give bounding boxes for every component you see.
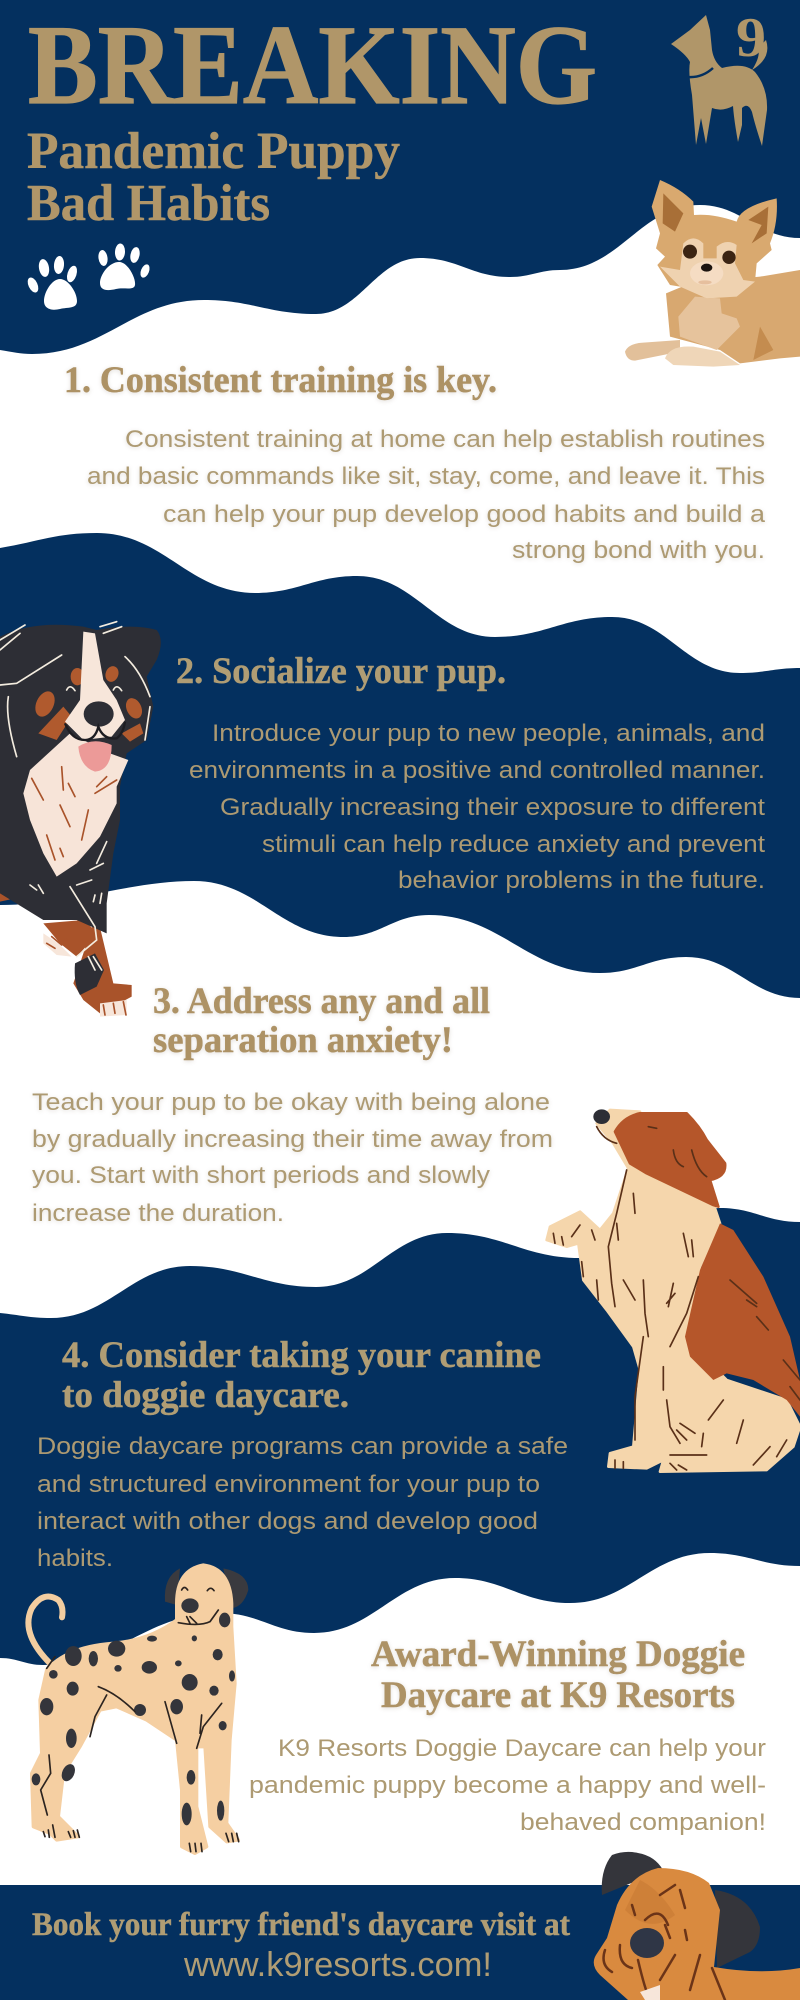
callout: booking text: www.k9resorts.com! — [183, 1946, 492, 1984]
text block 1: strong bond with you. — [512, 537, 765, 564]
heading 4: 4. Consider taking your canine — [62, 1335, 541, 1376]
illustration: chihuahua puppy — [625, 180, 800, 367]
heading 3: 3. Address any and all — [153, 981, 490, 1022]
subtitle: Pandemic Puppy — [27, 123, 400, 180]
heading: award-winning daycare: Award-Winning Doggie — [371, 1634, 745, 1675]
header wave panel — [0, 0, 800, 354]
icon: K9 logo: 9 — [736, 7, 766, 69]
icon: K9 logo — [671, 7, 767, 146]
text block 2: stimuli can help reduce anxiety and prevent — [262, 831, 765, 858]
heading 1: 1. Consistent training is key. — [64, 360, 497, 401]
text block 3: by gradually increasing their time away from — [32, 1126, 553, 1153]
illustration: bulldog — [594, 1852, 800, 2000]
text block 4: habits. — [37, 1545, 113, 1572]
title: BREAKING: BREAKING — [28, 3, 597, 128]
text block 4 — [37, 1433, 568, 1572]
heading 2: 2. Socialize your pup. — [176, 651, 506, 692]
text block: daycare description: K9 Resorts Doggie Daycare can help your — [278, 1735, 766, 1762]
illustration: collie dog — [547, 1109, 800, 1472]
text block 2: environments in a positive and controlled manner. — [189, 757, 765, 784]
text block 3: Teach your pup to be okay with being alone — [32, 1089, 550, 1116]
heading 4: to doggie daycare. — [62, 1375, 349, 1416]
heading 4 — [62, 1335, 541, 1416]
text block 1: and basic commands like sit, stay, come, and leave it. This — [87, 463, 765, 490]
text block 1: can help your pup develop good habits and build a — [163, 501, 766, 528]
text block 1 — [87, 426, 766, 564]
text block 2 — [189, 720, 765, 894]
text block 4: interact with other dogs and develop good — [37, 1508, 538, 1535]
illustration: dalmatian — [28, 1565, 248, 1853]
heading: award-winning daycare: Daycare at K9 Resorts — [381, 1675, 735, 1716]
text block 2: Gradually increasing their exposure to different — [220, 794, 765, 821]
subtitle — [27, 123, 400, 232]
heading 3 — [153, 981, 490, 1061]
panel: section 2 wave — [0, 533, 800, 998]
text block 2: behavior problems in the future. — [398, 867, 765, 894]
illustration: bernese mountain dog — [0, 622, 161, 1017]
text block: daycare description — [249, 1735, 766, 1836]
text block 4: Doggie daycare programs can provide a safe — [37, 1433, 568, 1460]
panel: footer band — [0, 1885, 800, 2000]
text block 3: you. Start with short periods and slowly — [32, 1162, 490, 1189]
text block 2: Introduce your pup to new people, animals, and — [212, 720, 765, 747]
callout: booking text — [32, 1907, 570, 1984]
text block: daycare description: behaved companion! — [520, 1809, 766, 1836]
icon: paw prints — [26, 243, 151, 310]
text block 3: increase the duration. — [32, 1200, 284, 1227]
text block 1: Consistent training at home can help establish routines — [125, 426, 765, 453]
text block 3 — [32, 1089, 553, 1227]
heading 3: separation anxiety! — [153, 1020, 453, 1061]
heading: award-winning daycare — [371, 1634, 745, 1716]
callout: booking text: Book your furry friend's daycare visit at — [32, 1907, 570, 1943]
panel: section 4 wave — [0, 1208, 800, 1665]
subtitle: Bad Habits — [27, 175, 270, 232]
text block 4: and structured environment for your pup to — [37, 1471, 540, 1498]
text block: daycare description: pandemic puppy become a happy and well- — [249, 1772, 766, 1799]
